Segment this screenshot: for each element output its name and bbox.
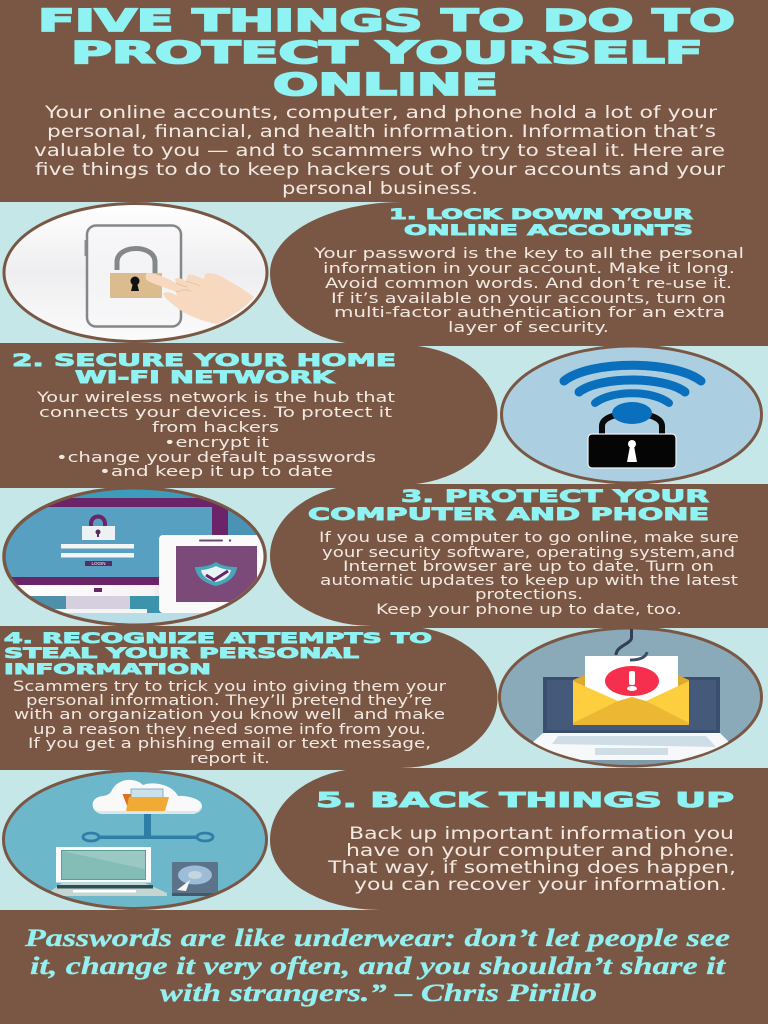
heading: WI-FI NETWORK (75, 368, 336, 387)
intro text: personal, financial, and health information. Information that’s (47, 122, 716, 141)
body text: information in your account. Make it long. (323, 261, 735, 277)
body text: protections. (475, 587, 583, 603)
body text: If you use a computer to go online, make sure (319, 530, 739, 546)
heading (389, 207, 693, 239)
heading: INFORMATION (4, 662, 211, 678)
body text: layer of security. (448, 320, 609, 336)
quote: it, change it very often, and you shouldn’t share it (30, 953, 726, 980)
body text: •encrypt it (164, 435, 269, 451)
body text: up a reason they need some info from you. (33, 722, 426, 738)
heading: 5. BACK THINGS UP (316, 788, 734, 812)
body text: automatic updates to keep up with the latest (320, 573, 738, 589)
heading: 4. RECOGNIZE ATTEMPTS TO (4, 631, 432, 647)
panel: step 3 protect computer and phone (0, 484, 768, 627)
body text (36, 390, 395, 480)
quote: with strangers.” – Chris Pirillo (160, 980, 597, 1007)
title (38, 4, 735, 103)
body text: If you get a phishing email or text message, (28, 736, 431, 752)
brown text shape (270, 202, 768, 345)
intro text: five things to do to keep hackers out of your accounts and your (35, 160, 725, 179)
body text (319, 530, 739, 618)
icon: login screen and tablet (0, 488, 270, 627)
title: ONLINE (273, 68, 498, 103)
quote (24, 925, 730, 1007)
icon: login screen and tablet: LOGIN (91, 561, 106, 566)
body text: Your password is the key to all the personal (313, 246, 744, 262)
icon: cloud backup network (4, 770, 266, 908)
heading: COMPUTER AND PHONE (308, 505, 709, 524)
body text: connects your devices. To protect it (39, 405, 392, 421)
body text: from hackers (152, 420, 279, 436)
intro text (34, 103, 725, 198)
title: FIVE THINGS TO DO TO (38, 4, 735, 39)
body text (13, 679, 446, 767)
brown text shape (0, 626, 498, 769)
body text (313, 246, 744, 336)
body text: Internet browser are up to date. Turn on (343, 559, 714, 575)
heading (4, 631, 432, 678)
body text: multi-factor authentication for an extra (334, 305, 725, 321)
body text: Keep your phone up to date, too. (376, 602, 682, 618)
heading (12, 351, 396, 387)
body text: with an organization you know well and make (14, 707, 445, 723)
intro text: Your online accounts, computer, and phone hold a lot of your (44, 103, 717, 122)
brown text shape (270, 768, 768, 910)
body text: That way, if something does happen, (327, 858, 736, 877)
heading (308, 487, 710, 524)
heading: STEAL YOUR PERSONAL (4, 646, 359, 662)
panel: step 4 recognize phishing (0, 626, 768, 769)
body text (327, 824, 736, 894)
panel: step 1 lock down accounts (0, 202, 768, 345)
heading: ONLINE ACCOUNTS (404, 223, 693, 239)
icon: padlock on phone with hand (4, 204, 267, 342)
panel: step 2 secure wi-fi (0, 345, 768, 487)
icon: wi-fi with padlock (502, 346, 762, 483)
brown text shape (270, 484, 768, 626)
intro text: valuable to you — and to scammers who try to steal it. Here are (34, 141, 725, 160)
quote: Passwords are like underwear: don’t let people see (24, 925, 730, 952)
body text: personal information. They’ll pretend they’re (26, 693, 432, 709)
heading: 2. SECURE YOUR HOME (12, 351, 396, 370)
body text: your security software, operating system,and (322, 545, 735, 561)
body text: If it’s available on your accounts, turn on (331, 291, 726, 307)
body text: Scammers try to trick you into giving them your (13, 679, 446, 695)
title: PROTECT YOURSELF (71, 36, 703, 71)
body text: have on your computer and phone. (346, 841, 735, 860)
brown text shape (0, 345, 498, 487)
body text: Your wireless network is the hub that (36, 390, 395, 406)
heading: 3. PROTECT YOUR (401, 487, 710, 506)
heading: 1. LOCK DOWN YOUR (389, 207, 693, 223)
body text: •and keep it up to date (99, 464, 333, 480)
body text: report it. (190, 751, 270, 767)
body text: •change your default passwords (56, 450, 376, 466)
panel: step 5 back things up (0, 768, 768, 910)
body text: Avoid common words. And don’t re-use it. (325, 276, 732, 292)
icon: phishing hook and envelope on laptop (500, 628, 762, 768)
body text: Back up important information you (349, 824, 734, 843)
intro text: personal business. (282, 179, 478, 198)
body text: you can recover your information. (354, 875, 727, 894)
